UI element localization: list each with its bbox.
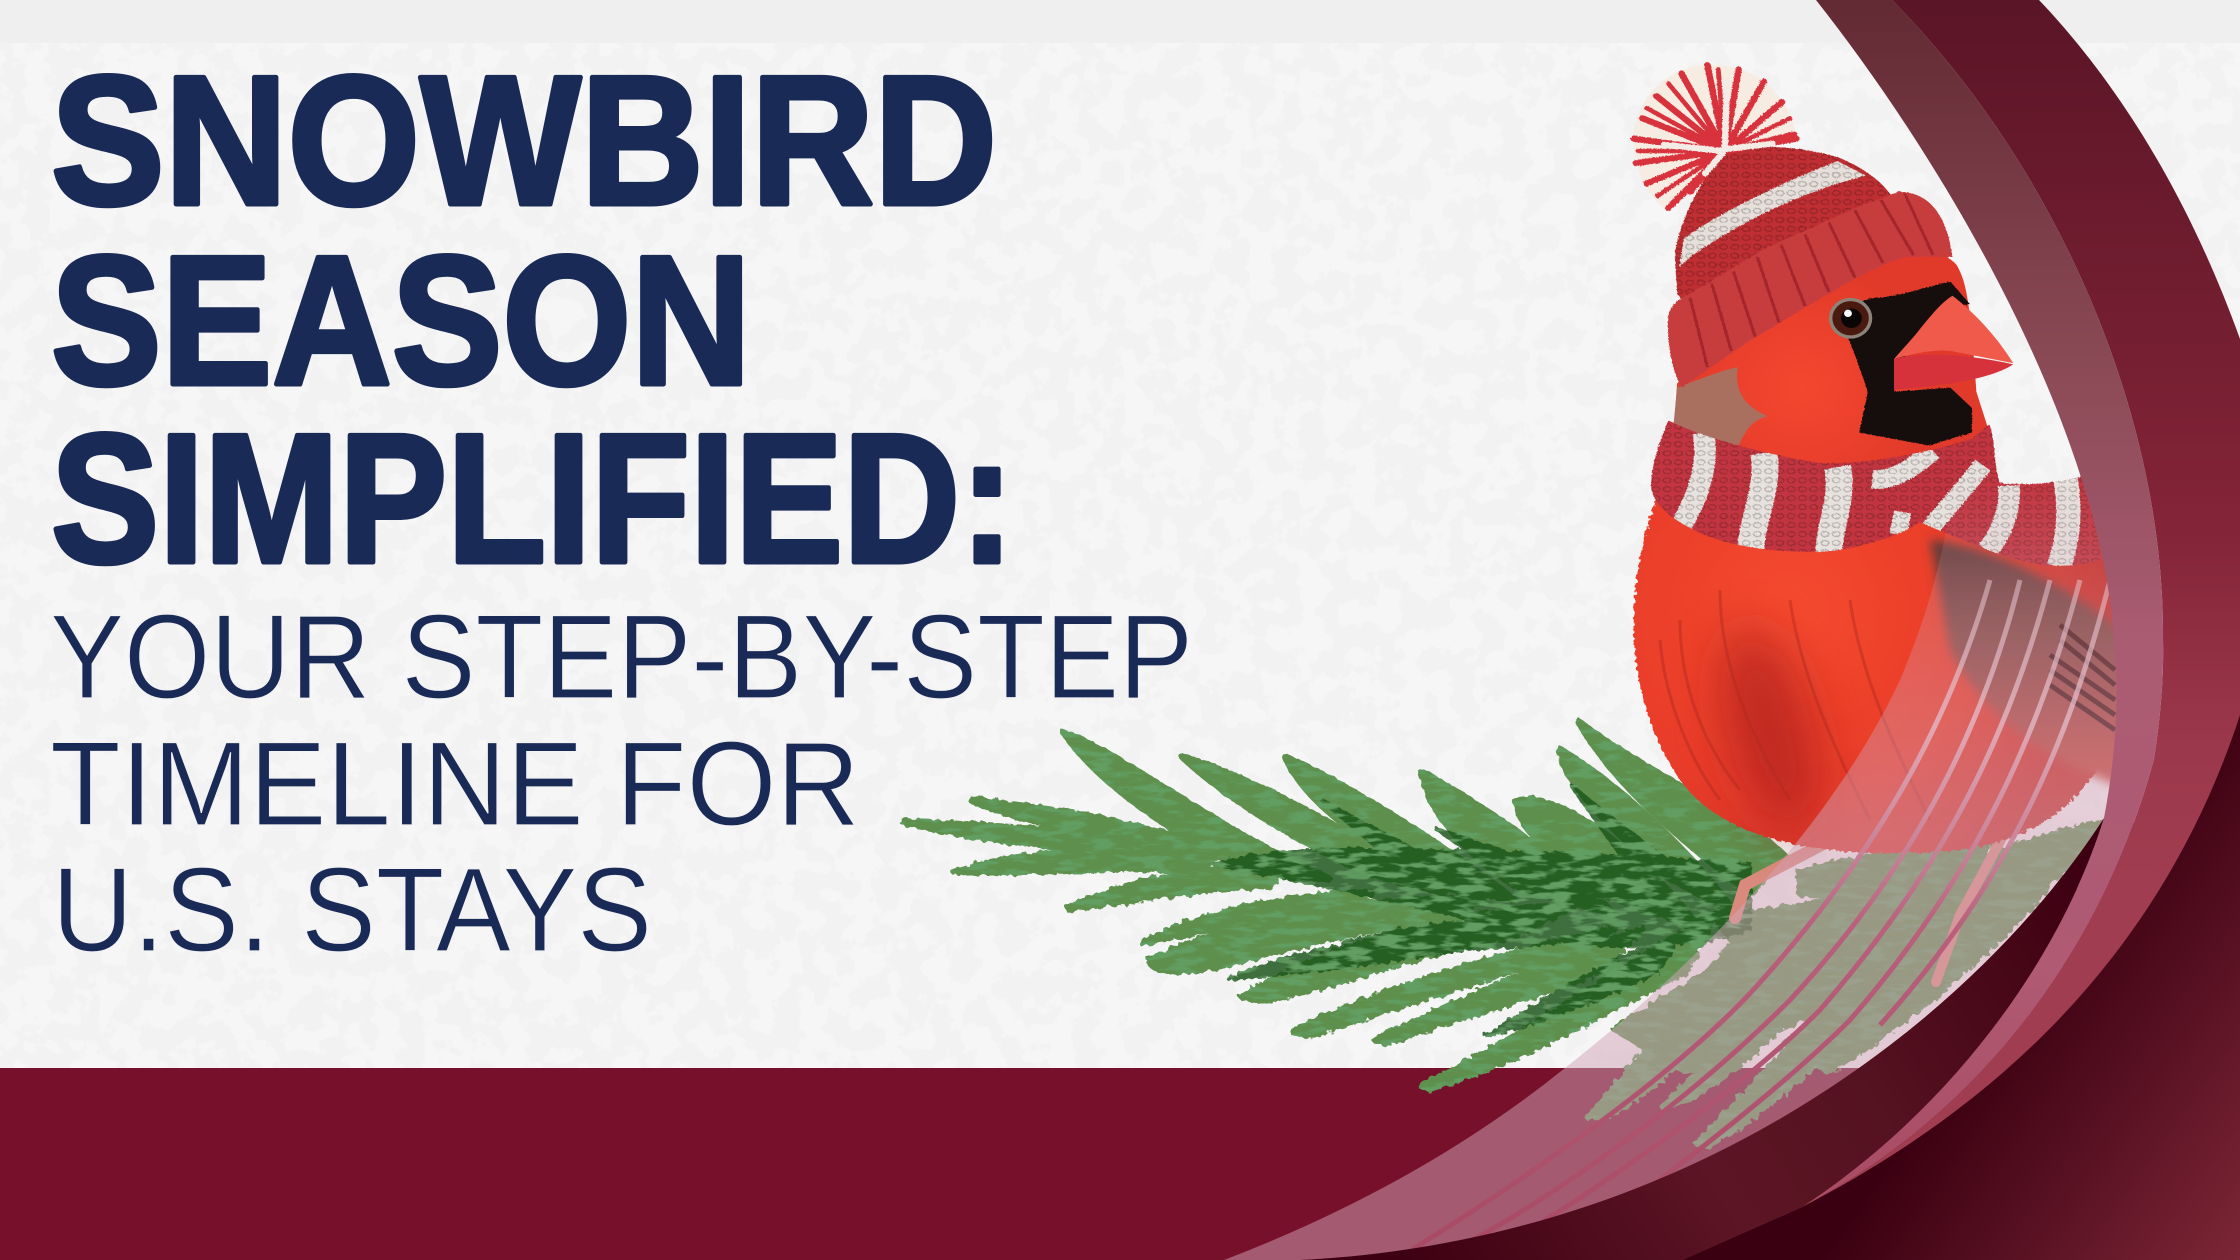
translucent curved sheet (1224, 470, 2130, 1260)
pompom (1634, 64, 1796, 212)
dark crescent (1300, 818, 2104, 1260)
hat crown (1675, 147, 1894, 310)
gray cheek (1673, 367, 1768, 461)
black mask (1838, 282, 1972, 446)
illustration: cardinal bird (1634, 64, 2130, 982)
knit scarf (1651, 420, 2102, 567)
bird head (1673, 245, 2013, 490)
subtitle: your step-by-step timeline for U.S. stays: TIMELINE FOR (50, 717, 860, 851)
body shading (1702, 618, 1838, 842)
subtitle: your step-by-step timeline for U.S. stays: U.S. STAYS (52, 843, 652, 977)
bird wing (1930, 540, 2130, 790)
beak (1894, 296, 2013, 390)
illustration: pine branch (903, 721, 2100, 1146)
subtitle: your step-by-step timeline for U.S. stays (50, 590, 1193, 977)
title: Snowbird Season Simplified: SNOWBIRD (51, 37, 997, 243)
sheet fine lines (1413, 580, 2110, 1260)
bottom burgundy band (0, 1068, 2240, 1260)
curved band: translucent pink (1802, 0, 2163, 1207)
dark bottom-right corner (1682, 700, 2240, 1260)
subtitle: your step-by-step timeline for U.S. stays: YOUR STEP-BY-STEP (50, 590, 1193, 724)
eye (1829, 298, 1872, 339)
bird legs (1735, 838, 2002, 982)
hat cuff (1668, 192, 1952, 388)
curved band: burgundy to rose (1802, 0, 2240, 1207)
title: Snowbird Season Simplified: SEASON (51, 217, 751, 423)
title: Snowbird Season Simplified (51, 37, 1014, 601)
body feather streaks (1660, 590, 1930, 820)
knit hat with pompom (1634, 64, 1952, 388)
title: Snowbird Season Simplified: SIMPLIFIED: (51, 395, 1014, 601)
bird body (1634, 483, 2125, 853)
